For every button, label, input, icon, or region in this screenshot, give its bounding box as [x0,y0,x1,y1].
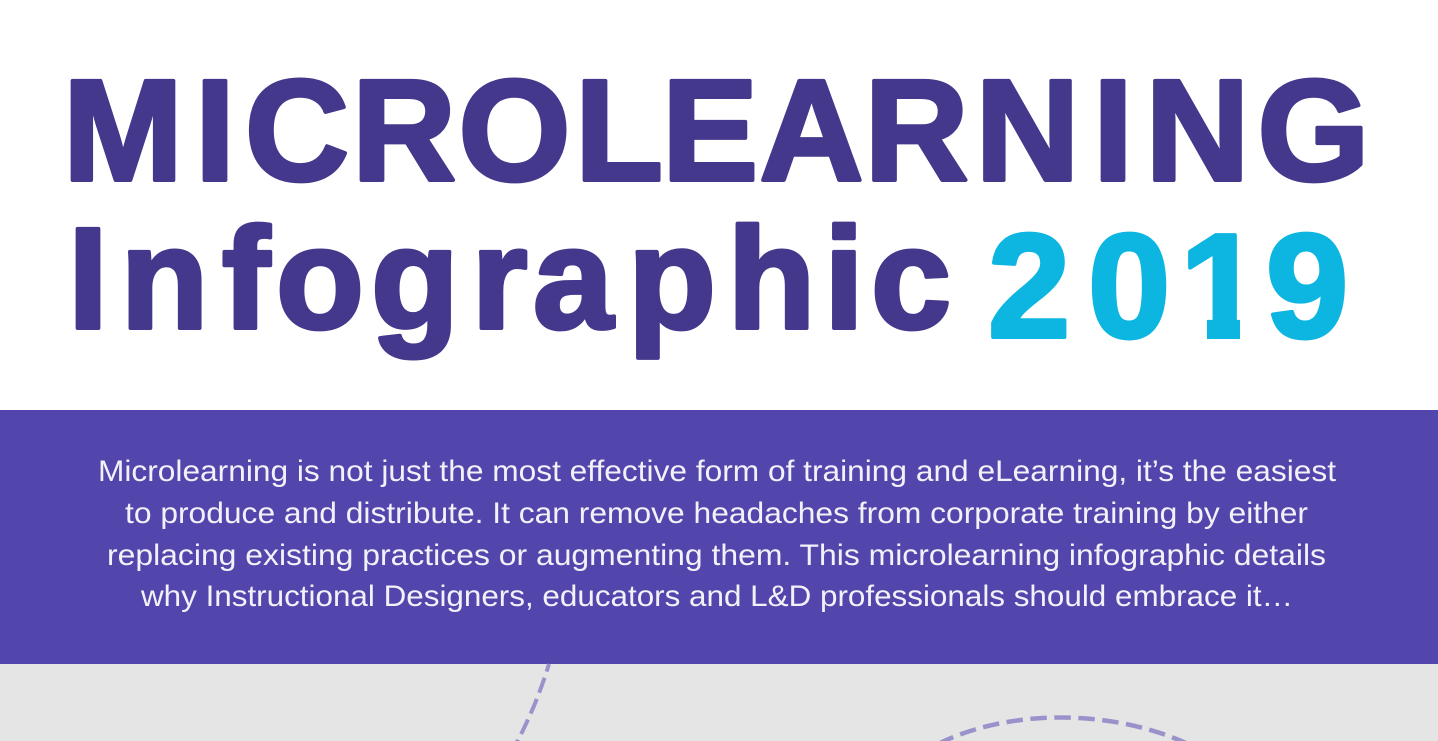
intro text: why Instructional Designers, educators and L&D professionals should embrace it… [140,580,1293,613]
title [63,50,1370,369]
title year: 2019: 2019 [988,204,1348,369]
title line: MICROLEARNING: MICROLEARNING [63,50,1370,211]
intro text: Microlearning is not just the most effective form of training and eLearning, it’s the easiest [98,455,1337,488]
dashed path: right arc [940,718,1186,741]
panel: grey timeline section [0,664,1438,741]
title line: Infographic: Infographic [68,198,951,359]
panel: introduction band [0,410,1438,664]
intro text [98,455,1337,613]
intro text: replacing existing practices or augmenting them. This microlearning infographic details [107,539,1326,572]
intro text: to produce and distribute. It can remove headaches from corporate training by either [125,497,1308,530]
dashed path: left curve [516,664,549,741]
